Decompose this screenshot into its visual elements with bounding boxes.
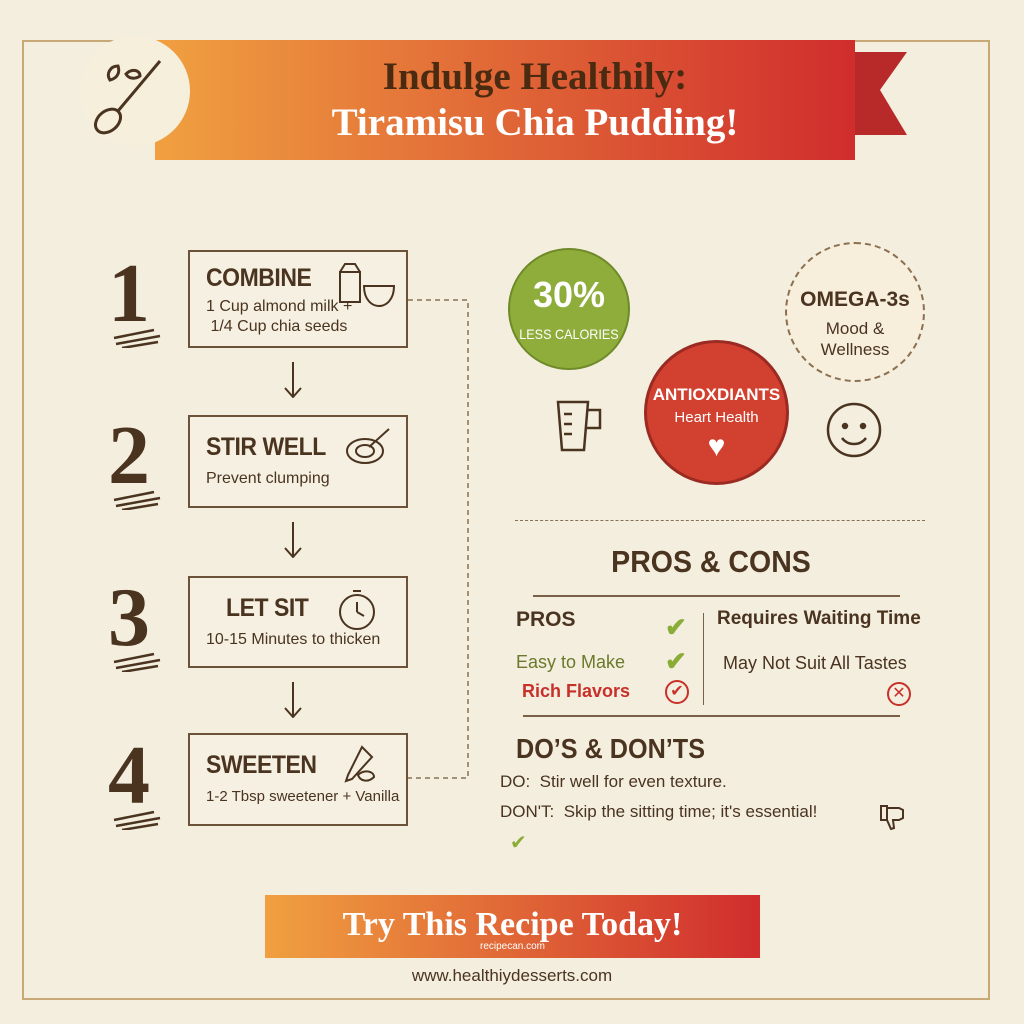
step 3: 3 bbox=[108, 571, 150, 664]
pros/cons table: ✔ bbox=[665, 646, 687, 676]
heading: pros & cons: PROS & CONS bbox=[611, 544, 811, 579]
heading: do's & don'ts: DO’S & DON’TS bbox=[516, 733, 705, 764]
icon: spoon bbox=[80, 36, 190, 146]
arrow bbox=[284, 682, 302, 718]
badge: omega-3s: Wellness bbox=[821, 340, 889, 359]
badge: 30% less calories bbox=[508, 248, 630, 370]
badge: 30% less calories: 30% bbox=[533, 274, 605, 315]
dashed connector bbox=[408, 299, 469, 779]
badge: antioxidants: ANTIOXDIANTS bbox=[653, 385, 780, 404]
do/don't text: DON'T: Skip the sitting time; it's essential! bbox=[500, 802, 817, 821]
CTA button bbox=[265, 895, 760, 958]
pros/cons table: ✔ bbox=[670, 683, 684, 700]
pros/cons table bbox=[516, 608, 921, 706]
pros/cons table: ✔ bbox=[665, 612, 687, 642]
badge: antioxidants: Heart Health bbox=[674, 409, 759, 426]
arrow bbox=[284, 522, 302, 558]
step 2: 2 bbox=[108, 409, 150, 502]
arrow bbox=[284, 362, 302, 398]
badge: antioxidants bbox=[644, 340, 789, 485]
text: 1 Cup almond milk + bbox=[206, 298, 352, 315]
text: LET SIT bbox=[226, 594, 308, 622]
pros/cons table: Easy to Make bbox=[516, 652, 625, 672]
title bbox=[332, 55, 738, 144]
footer url: www.healthiydesserts.com bbox=[412, 966, 612, 985]
header banner bbox=[155, 40, 907, 160]
badge: antioxidants: ♥ bbox=[708, 430, 725, 463]
text: Prevent clumping bbox=[206, 470, 330, 487]
title: Indulge Healthily: bbox=[383, 55, 687, 98]
pros/cons table: May Not Suit All Tastes bbox=[723, 653, 907, 673]
do/don't text: ✔ bbox=[510, 832, 527, 854]
step 1: 1 bbox=[108, 247, 150, 340]
text: 1/4 Cup chia seeds bbox=[210, 318, 347, 335]
divider dashed bbox=[515, 520, 925, 521]
text: STIR WELL bbox=[206, 433, 326, 461]
text: 10-15 Minutes to thicken bbox=[206, 631, 380, 648]
title: Tiramisu Chia Pudding! bbox=[332, 101, 738, 144]
text: COMBINE bbox=[206, 264, 311, 292]
pros/cons table: Requires Waiting Time bbox=[717, 608, 921, 629]
do/don't text bbox=[500, 772, 904, 854]
text: SWEETEN bbox=[206, 751, 317, 779]
CTA button: Try This Recipe Today! bbox=[343, 906, 682, 943]
icon: measuring cup bbox=[556, 400, 602, 452]
badge: omega-3s: Mood & bbox=[826, 319, 884, 338]
text: 1-2 Tbsp sweetener + Vanilla bbox=[206, 788, 399, 805]
badge: 30% less calories: LESS CALORIES bbox=[519, 326, 619, 342]
do/don't text: DO: Stir well for even texture. bbox=[500, 772, 727, 791]
pros/cons table: Rich Flavors bbox=[522, 681, 630, 701]
pros/cons table: PROS bbox=[516, 608, 576, 631]
pros/cons table: ✕ bbox=[892, 685, 906, 702]
badge: omega-3s bbox=[785, 242, 925, 382]
badge: omega-3s: OMEGA-3s bbox=[800, 288, 910, 311]
icon: smiley bbox=[826, 402, 882, 458]
CTA button: recipecan.com bbox=[480, 941, 545, 952]
step 4: 4 bbox=[108, 729, 150, 822]
